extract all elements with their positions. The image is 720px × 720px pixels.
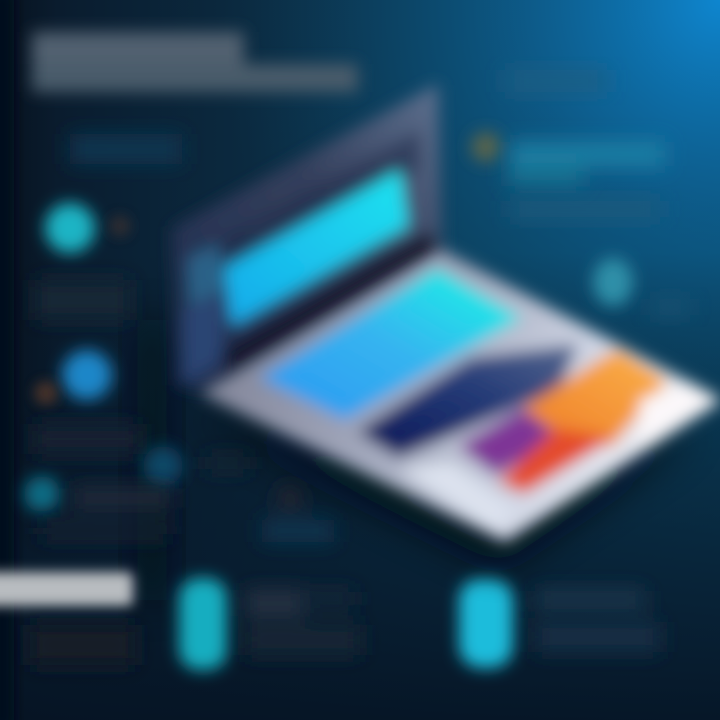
heading right cyan: [508, 142, 665, 186]
blue band: [260, 268, 522, 420]
icon: cyan pill bottom left: [179, 578, 227, 670]
hinge shadow: [222, 230, 442, 378]
white button: [0, 572, 133, 606]
text block: bottom middle: [245, 590, 360, 655]
icon: teal circle right: [593, 258, 690, 316]
icon: cyan pill bottom right: [459, 578, 513, 668]
laptop shadow: [185, 410, 700, 565]
icon: small orange dot top right: [471, 132, 501, 162]
title block: [32, 32, 358, 92]
screen top inner: [190, 130, 420, 290]
tablet base: [200, 249, 720, 542]
laptop illustration: [172, 84, 720, 565]
navy band: [358, 344, 578, 458]
text below button: [30, 625, 135, 665]
screen lower strip: [184, 295, 222, 385]
screen left strip: [188, 244, 222, 306]
bright corner: [640, 382, 718, 450]
text block: bottom right: [535, 590, 660, 652]
icon: blue circle left middle: [34, 350, 112, 405]
text block right: [510, 200, 660, 218]
icon: cyan circle left top: [45, 203, 131, 253]
icon: small teal circle: [24, 446, 183, 512]
screen cyan band: [224, 170, 408, 326]
red patch: [498, 428, 614, 494]
heading top right: [505, 70, 607, 92]
center small labels: [205, 455, 334, 542]
orange band: [516, 348, 668, 446]
text block: third item: [40, 488, 172, 538]
laptop screen: [172, 84, 442, 392]
text block: second item: [35, 424, 140, 454]
subheading left: [70, 134, 182, 164]
purple patch: [458, 408, 560, 476]
bright bottom edge: [400, 462, 515, 530]
text block: first item: [35, 280, 130, 320]
